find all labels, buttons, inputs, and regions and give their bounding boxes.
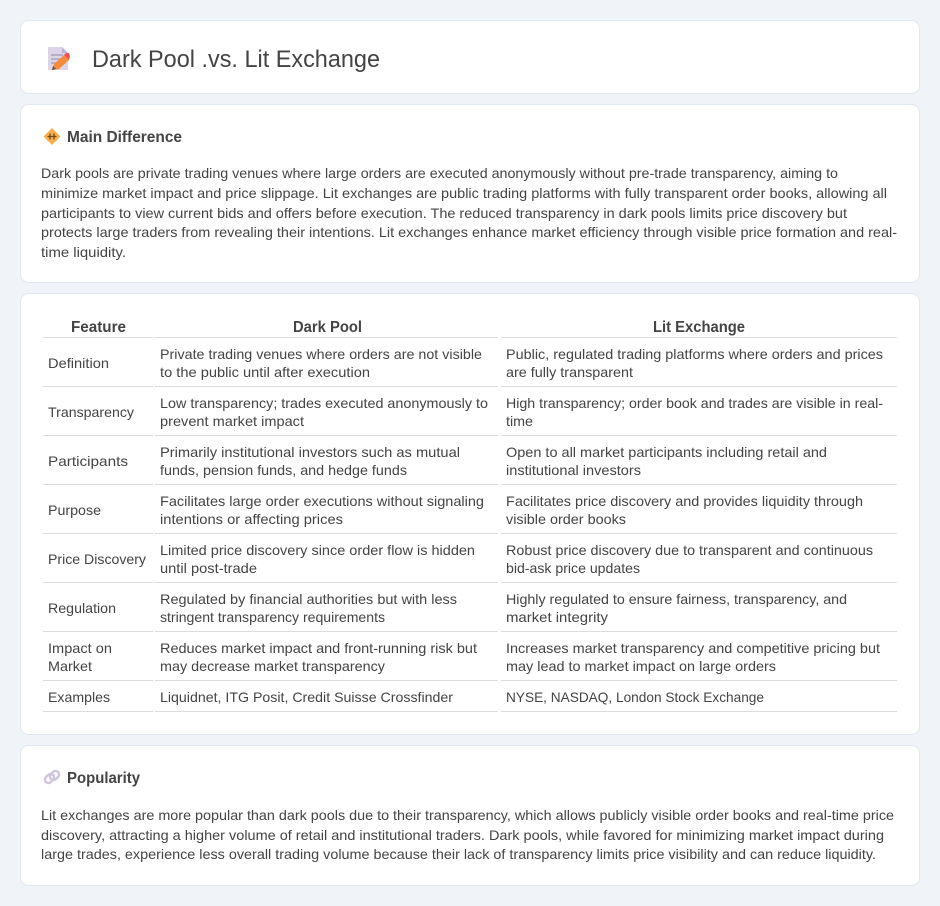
- row: impact on market: Reduces market impact and front-running risk but: [160, 640, 477, 656]
- table header: Dark Pool: [293, 319, 362, 336]
- text block: main difference paragraph: participants to view current bids and offers before execution. The reduced transparency in dark pools limits price discovery but: [41, 205, 847, 221]
- text block: main difference paragraph: Dark pools are private trading venues where large orders are executed anonymously without pre-trade transparency, aiming to: [41, 165, 838, 181]
- row: price discovery: Price Discovery: [48, 551, 146, 567]
- row: participants: [48, 444, 827, 478]
- panel: title card: [20, 20, 920, 94]
- row: participants: funds, pension funds, and hedge funds: [160, 462, 407, 478]
- row: transparency: High transparency; order book and trades are visible in real-: [506, 395, 883, 411]
- text block: popularity paragraph: large trades, experience less overall trading volume because their lack of transparency limits price visibility and can reduce liquidity.: [41, 846, 876, 862]
- heading: main difference: Main Difference: [67, 129, 182, 146]
- text block: main difference paragraph: time liquidity.: [41, 244, 126, 260]
- text block: popularity paragraph: [41, 807, 894, 862]
- row: purpose: Purpose: [48, 502, 101, 518]
- row: participants: Participants: [48, 453, 128, 469]
- row: definition: to the public until after execution: [160, 364, 370, 380]
- panel: popularity: [20, 746, 920, 886]
- row: regulation: Highly regulated to ensure fairness, transparency, and: [506, 591, 847, 607]
- row: examples: Liquidnet, ITG Posit, Credit Suisse Crossfinder: [160, 689, 453, 705]
- row: regulation: [48, 591, 847, 625]
- row: purpose: [48, 493, 863, 527]
- text block: main difference paragraph: protects large traders from revealing their intentions. Lit exchanges enhance market efficiency through visible price formation and real-: [41, 224, 897, 240]
- row: purpose: visible order books: [506, 511, 626, 527]
- panel: main difference: [20, 104, 920, 282]
- row: participants: Primarily institutional investors such as mutual: [160, 444, 460, 460]
- row: definition: Private trading venues where orders are not visible: [160, 346, 482, 362]
- row: regulation: stringent transparency requirements: [160, 609, 385, 625]
- table header: [71, 319, 745, 336]
- row: impact on market: may lead to market impact on large orders: [506, 658, 776, 674]
- row: examples: NYSE, NASDAQ, London Stock Exchange: [506, 689, 764, 705]
- row: participants: institutional investors: [506, 462, 641, 478]
- table header: Feature: [71, 319, 126, 336]
- row: impact on market: Increases market transparency and competitive pricing but: [506, 640, 880, 656]
- row: examples: Examples: [48, 689, 110, 705]
- row: impact on market: Impact on: [48, 640, 112, 656]
- row: definition: Public, regulated trading platforms where orders and prices: [506, 346, 883, 362]
- heading: popularity: Popularity: [67, 770, 140, 787]
- row: transparency: time: [506, 413, 533, 429]
- row: transparency: Low transparency; trades executed anonymously to: [160, 395, 488, 411]
- row: purpose: Facilitates price discovery and provides liquidity through: [506, 493, 863, 509]
- row: regulation: Regulation: [48, 600, 116, 616]
- text block: main difference paragraph: [41, 165, 897, 260]
- row: transparency: prevent market impact: [160, 413, 304, 429]
- table header: Lit Exchange: [653, 319, 745, 336]
- row: regulation: market integrity: [506, 609, 608, 625]
- row: participants: Open to all market participants including retail and: [506, 444, 827, 460]
- icon: document with pencil: [48, 47, 70, 70]
- panel: comparison table: [20, 294, 920, 734]
- row: transparency: Transparency: [48, 404, 134, 420]
- row: transparency: [48, 395, 883, 429]
- icon: link: [43, 769, 61, 785]
- icon: orange diamond: [44, 128, 60, 145]
- row: examples: [48, 689, 764, 705]
- row: price discovery: until post-trade: [160, 560, 257, 576]
- row: impact on market: [48, 640, 880, 674]
- text block: popularity paragraph: discovery, attracting a higher volume of retail and institutional traders. Dark pools, while favored for minimizing market impact during: [41, 827, 884, 843]
- row: purpose: Facilitates large order executions without signaling: [160, 493, 484, 509]
- row: regulation: Regulated by financial authorities but with less: [160, 591, 457, 607]
- row: price discovery: bid-ask price updates: [506, 560, 640, 576]
- row: purpose: intentions or affecting prices: [160, 511, 343, 527]
- row: definition: [48, 346, 883, 380]
- row: impact on market: Market: [48, 658, 92, 674]
- row: price discovery: Robust price discovery due to transparent and continuous: [506, 542, 873, 558]
- row: price discovery: [48, 542, 873, 576]
- text block: main difference paragraph: minimize market impact and price slippage. Lit exchanges are public trading platforms with fully transparent order books, allowing all: [41, 185, 887, 201]
- row: price discovery: Limited price discovery since order flow is hidden: [160, 542, 475, 558]
- row: impact on market: may decrease market transparency: [160, 658, 385, 674]
- text block: popularity paragraph: Lit exchanges are more popular than dark pools due to their transparency, which allows publicly visible order books and real-time price: [41, 807, 894, 823]
- row: definition: Definition: [48, 355, 109, 371]
- row: definition: are fully transparent: [506, 364, 633, 380]
- title: Dark Pool .vs. Lit Exchange: [92, 46, 380, 73]
